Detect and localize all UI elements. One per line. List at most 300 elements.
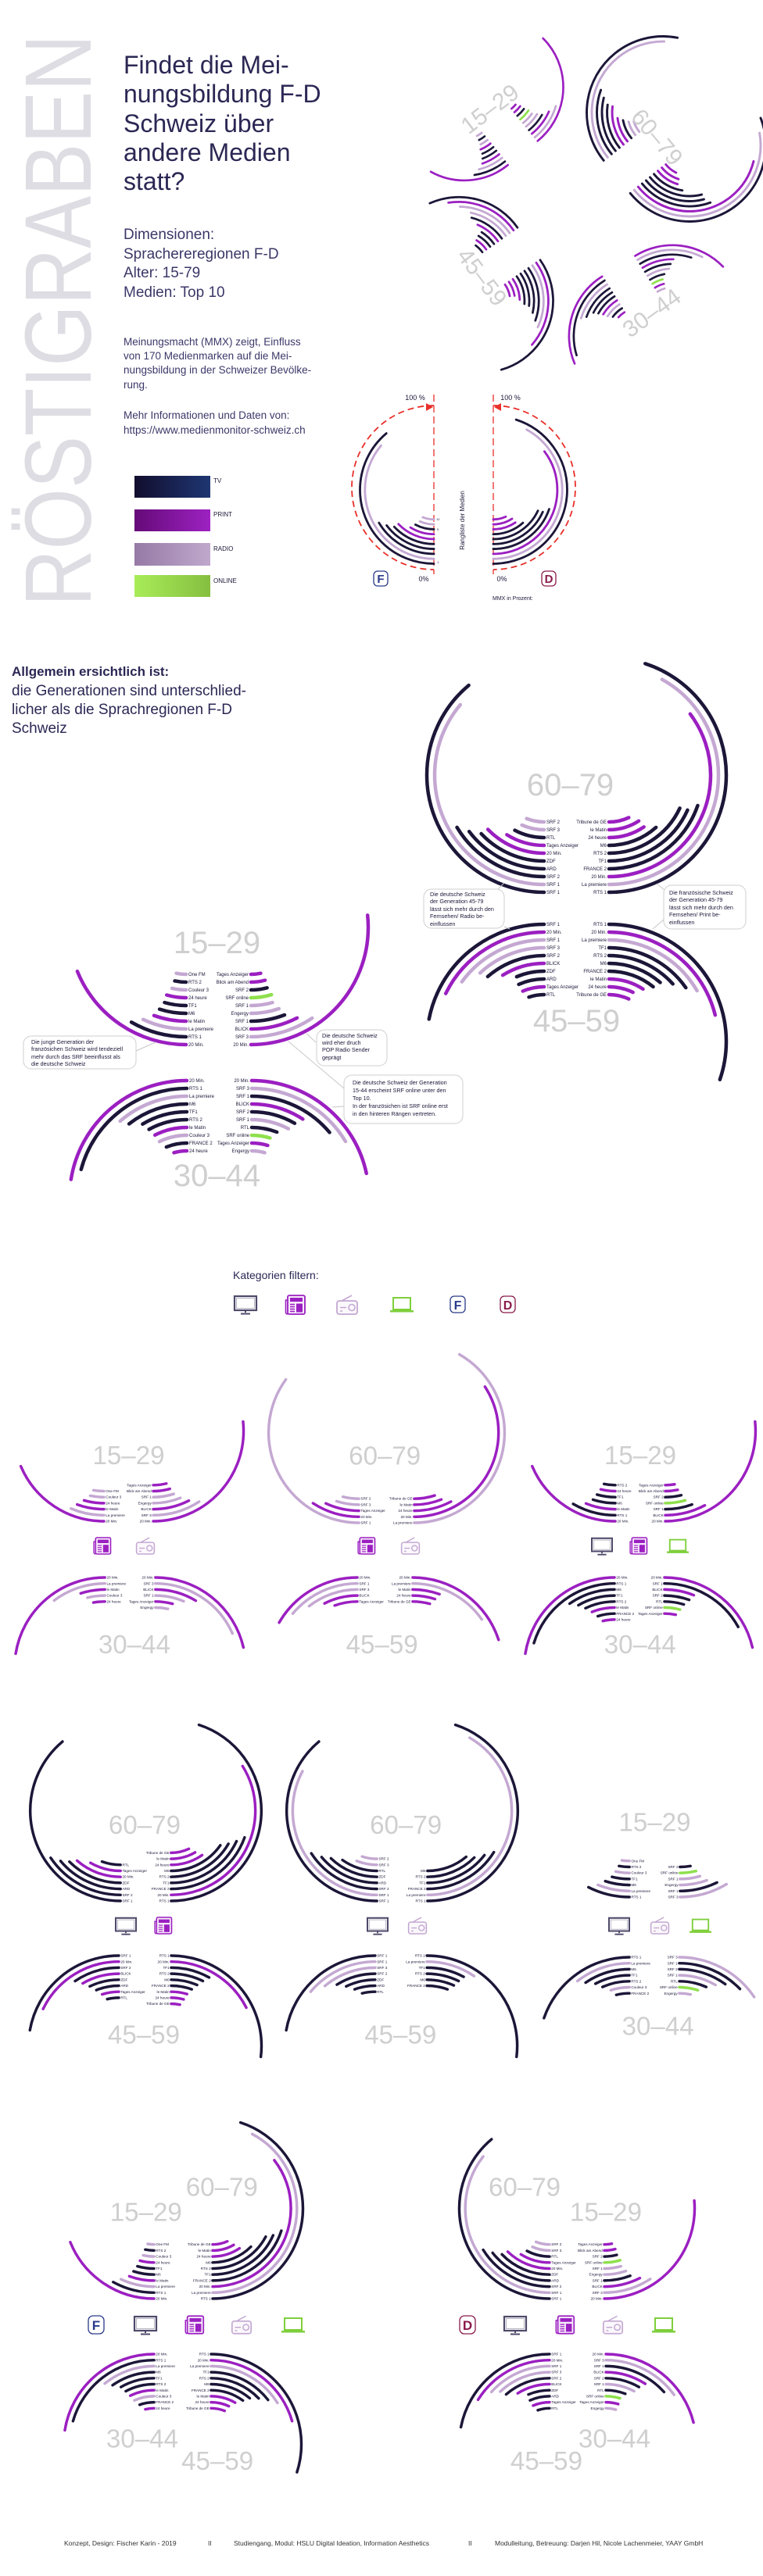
filtered chart: 45-59 print+radio: Tribune de GE [388, 1599, 411, 1603]
chart 15-29 main: le Matin [188, 1020, 205, 1024]
chart 60-79 main: RTS 1 [593, 891, 607, 895]
chart 30-44 main: BLICK [236, 1102, 249, 1107]
top cluster: rotated charts: 60–79 [626, 104, 687, 171]
filtered chart: 45-59 tv+radio: SRF 3 [377, 1966, 388, 1970]
filtered chart: 45-59 tv+radio: RTS 1 [415, 1954, 425, 1958]
combined chart D: 45-59 / 30-44: RTL [597, 2388, 604, 2392]
title: Findet die Mei- [124, 51, 289, 79]
filtered chart: 45-59 tv+print: 24 heure [155, 1995, 170, 1999]
filtered chart: 45-59 tv+print: ARD [120, 1984, 129, 1988]
axis label: Rangliste der Medien [459, 491, 466, 550]
chart 30-44 main: SRF 2 [236, 1110, 250, 1115]
filtered chart: 60-79 tv+radio [287, 1720, 518, 1903]
chart 45-59 main: Tribune de GE [576, 993, 607, 998]
filtered chart: 30-44 print+radio: Couleur 3 [106, 1594, 123, 1598]
filtered chart: 30-44 tv+print+online: BLICK [652, 1588, 664, 1592]
dimensions text: Medien: Top 10 [124, 284, 225, 301]
chart 15-29 main: RTS 2 [188, 981, 202, 985]
filtered chart: 30-44 tv+radio+online: 30–44 [622, 2012, 694, 2041]
combined chart F: 30-44 / 45-59: le Matin [197, 2394, 210, 2398]
callout: SRF online: in den hinteren Rängen vertreten. [353, 1110, 436, 1117]
description paragraph: rung. [124, 379, 148, 391]
filtered chart: 15-29 tv+print+online [525, 1341, 755, 1524]
chart 30-44 main: SRF 3 [236, 1087, 250, 1091]
filtered chart: 60-79 tv+radio: RTL [378, 1869, 386, 1873]
filtered chart: 15-29 tv+print+online: SRF online [646, 1501, 664, 1505]
icons: print radio [94, 1538, 154, 1554]
filtered chart: 45-59 tv+print: 20 Min. [158, 1960, 170, 1963]
filtered chart: 45-59 print+radio: SRF 3 [359, 1588, 370, 1592]
filtered chart: 15-29 print+radio: La premiere [106, 1513, 125, 1517]
footer credits: Modulleitung, Betreuung: Darjen Hil, Nicole Lachenmeier, YAAY GmbH [495, 2539, 703, 2547]
chart 15-29 main: TF1 [188, 1004, 197, 1009]
combined chart F: 30-44 / 45-59: RTS 1 [156, 2358, 167, 2362]
filtered chart: 30-44 tv+print+online: SRF 1 [653, 1581, 663, 1585]
combined chart F: 15-29 / 60-79: RTS 1 [156, 2291, 167, 2295]
callout: pop radio: geprägt [322, 1054, 341, 1061]
chart 60-79 main: Tribune de GE [576, 820, 607, 825]
filtered chart: 60-79 tv+print: Tribune de GE [146, 1851, 170, 1855]
combined chart D: 60-79 / 15-29 [459, 2118, 695, 2301]
filtered chart: 30-44 tv+print+online: 20 Min. [651, 1576, 663, 1580]
filtered chart: 45-59 tv+radio: RTS 2 [415, 1972, 425, 1976]
combined chart F: 15-29 / 60-79: 24 heure [156, 2260, 170, 2264]
filtered chart: 15-29 print+radio: BLICK [141, 1507, 152, 1511]
section 2 heading: Schweiz [12, 720, 67, 737]
filtered chart: 60-79 tv+print: le Matin [156, 1857, 170, 1861]
combined chart F: 30-44 / 45-59: M6 [204, 2382, 210, 2386]
combined chart F: 15-29 / 60-79: La premiere [156, 2285, 175, 2288]
filtered chart: 15-29 tv+radio+online: SRF 3 [668, 1895, 679, 1899]
combined chart D: 45-59 / 30-44: SRF 2 [594, 2376, 604, 2380]
chart 30-44 main: RTS 1 [189, 1087, 203, 1091]
filtered chart: 15-29 tv+radio+online: RTS 2 [631, 1865, 642, 1869]
icons: print radio [358, 1538, 419, 1554]
chart 60-79 main: 60–79 [527, 768, 614, 802]
chart 30-44 main: 30–44 [174, 1159, 260, 1193]
chart 30-44 main: Couleur 3 [189, 1134, 210, 1138]
chart 15-29 main: SRF online [225, 996, 249, 1001]
chart 15-29 main: SRF 1 [235, 1004, 249, 1009]
filtered chart: 15-29 print+radio: le Matin [106, 1507, 119, 1511]
filtered chart: 30-44 tv+radio+online: La premiere [631, 1961, 650, 1965]
chart 15-29 main: Blick am Abend [217, 981, 249, 985]
callout: SRF online: In der französichen ist SRF online erst [353, 1102, 448, 1109]
chart 45-59 main: RTL [546, 993, 556, 998]
chart 60-79 main: ZDF [546, 859, 556, 864]
legend diagram F [352, 394, 508, 586]
filtered chart: 45-59 tv+radio [285, 1954, 518, 2136]
chart 60-79 main: FRANCE 2 [583, 867, 607, 872]
filtered chart: 30-44 tv+radio+online: M6 [631, 1967, 636, 1971]
filtered chart: 45-59 print+radio: Tages Anzeiger [359, 1599, 384, 1603]
description paragraph: von 170 Medienmarken auf die Mei- [124, 350, 292, 362]
filtered chart: 15-29 tv+radio+online: SRF 2 [668, 1865, 679, 1869]
footer credits: Konzept, Design: Fischer Karin - 2019 [64, 2539, 177, 2547]
combined chart D: 60-79 / 15-29: SRF online [585, 2260, 603, 2264]
filtered chart: 30-44 tv+radio+online: RTS 2 [631, 1979, 642, 1983]
filtered chart: 15-29 print+radio: Blick am Abend [127, 1489, 152, 1493]
filtered chart: 30-44 tv+radio+online: FRANCE 2 [631, 1992, 650, 1995]
combined chart D: 45-59 / 30-44: SRF 1 [551, 2364, 562, 2368]
callout: young French generation [23, 1036, 156, 1069]
filtered chart: 30-44 tv+radio+online: RTL [671, 1979, 678, 1983]
chart 15-29 main: 15–29 [174, 926, 260, 960]
filtered chart: 15-29 tv+print+online: 24 heure [617, 1489, 632, 1493]
footer credits: II [208, 2539, 212, 2547]
filtered chart: 30-44 print+radio: Engergy [140, 1606, 154, 1610]
chart 60-79 main: 20 Min. [546, 852, 562, 856]
combined chart F: 30-44 / 45-59: M6 [156, 2371, 161, 2374]
combined chart F: 15-29 / 60-79: le Matin [199, 2249, 211, 2253]
legend diagram D [419, 394, 575, 602]
filtered chart: 60-79 tv+print: 20 Min. [122, 1875, 134, 1879]
filtered chart: 60-79 tv+print: 24 heure [155, 1863, 170, 1867]
filtered chart: 45-59 tv+print: le Matin [157, 1990, 170, 1994]
filtered chart: 60-79 tv+radio: TF1 [419, 1881, 426, 1885]
description paragraph: Mehr Informationen und Daten von: [124, 409, 289, 421]
combined chart F: 15-29 / 60-79: Tribune de GE [188, 2242, 211, 2246]
combined chart F: 30-44 / 45-59: RTS 2 [156, 2382, 167, 2386]
combined chart D: 45-59 / 30-44: SRF 1 [551, 2353, 562, 2356]
filtered chart: 15-29 tv+radio+online: SRF 1 [668, 1889, 679, 1893]
filtered chart: 30-44 tv+print+online: M6 [616, 1588, 622, 1592]
callout: German 45-79: Fernsehen/ Radio be- [430, 913, 485, 920]
filtered chart: 45-59 tv+radio: RTL [377, 1990, 384, 1994]
combined chart F: 15-29 / 60-79: 60–79 [186, 2173, 258, 2202]
filtered chart: 15-29 tv+radio+online: Couleur 3 [631, 1871, 647, 1875]
chart 30-44 main: SRF online [226, 1134, 250, 1138]
filtered chart: 45-59 tv+radio: La premiere [406, 1960, 425, 1963]
filtered chart: 45-59 tv+print: Tribune de GE [146, 2002, 170, 2006]
combined chart F: 30-44 / 45-59: RTS 2 [199, 2376, 210, 2380]
combined chart D: 60-79 / 15-29: 20 Min. [551, 2267, 563, 2271]
chart 60-79 main: TF1 [598, 859, 607, 864]
combined chart F: 30-44 / 45-59: Couleur 3 [156, 2394, 172, 2398]
combined chart F: 15-29 / 60-79: M6 [156, 2273, 161, 2277]
filtered chart: 45-59 tv+print: BLICK [120, 1972, 132, 1976]
filter icons row [235, 1295, 515, 1314]
combined chart D: 45-59 / 30-44: 30–44 [579, 2424, 650, 2453]
callout: pop radio: Die deutsche Schweiz [322, 1032, 378, 1039]
description paragraph: https://www.medienmonitor-schweiz.ch [124, 424, 306, 436]
chart 30-44 main: RTL [241, 1126, 250, 1131]
chart 45-59 main: SRF 2 [546, 954, 561, 959]
legend: colour swatches: ONLINE [213, 577, 237, 584]
chart 60-79 main: Tages Anzeiger [546, 844, 579, 849]
chart 30-44 main: Engergy [232, 1149, 249, 1154]
section 2 heading: licher als die Sprachregionen F-D [12, 702, 232, 718]
filtered chart: 45-59 tv+print: 45–59 [108, 2020, 180, 2049]
filtered chart: 30-44 print+radio: 20 Min. [106, 1576, 119, 1580]
combined chart F: 15-29 / 60-79: 20 Min. [156, 2297, 167, 2301]
filtered chart: 45-59 tv+radio: M6 [420, 1978, 425, 1981]
filter icons row: F [454, 1299, 462, 1313]
chart 45-59 main: RTS 1 [593, 923, 607, 927]
filtered chart: 45-59 tv+print: RTS 2 [159, 1972, 170, 1976]
legend: colour swatches: RADIO [213, 545, 233, 552]
chart 45-59 main: le Matin [590, 977, 607, 982]
combined chart D: 60-79 / 15-29: 20 Min. [591, 2297, 603, 2301]
chart 30-44 main: M6 [189, 1102, 196, 1107]
filtered chart: 45-59 print+radio [267, 1576, 503, 1758]
callout: French 45-79: der Generation 45-79 [669, 896, 722, 903]
dimensions text: Alter: 15-79 [124, 265, 200, 281]
filtered chart: 60-79 print+radio: La premiere [393, 1521, 413, 1525]
chart 45-59 main: ARD [546, 977, 557, 982]
filtered chart: 45-59 tv+radio: FRANCE 2 [407, 1984, 425, 1988]
title: nungsbildung F-D [124, 80, 321, 108]
combined chart D: 60-79 / 15-29: 15–29 [570, 2199, 642, 2228]
combined chart D: 60-79 / 15-29: RTL [551, 2255, 558, 2259]
filtered chart: 45-59 tv+radio: 45–59 [364, 2020, 436, 2049]
callout: young French generation: französichen Schweiz wird tendeziell [31, 1045, 123, 1052]
combined chart F: 15-29 / 60-79: One FM [156, 2242, 169, 2246]
combined chart F: 15-29 / 60-79: M6 [206, 2260, 211, 2264]
callout: SRF online: Die deutsche Schweiz der Generation [353, 1079, 447, 1086]
chart 45-59 main: M6 [600, 962, 607, 966]
chart 45-59 main: La premiere [582, 938, 607, 943]
filtered chart: 30-44 print+radio: BLICK [143, 1588, 154, 1592]
filtered chart: 15-29 tv+radio+online: Engergy [664, 1883, 679, 1887]
filtered chart: 45-59 print+radio: le Matin [398, 1588, 411, 1592]
filtered chart: 30-44 tv+radio+online: SRF online [660, 1985, 678, 1989]
filtered chart: 30-44 tv+radio+online: Engergy [664, 1992, 678, 1995]
filtered chart: 30-44 tv+print+online: 30–44 [604, 1631, 676, 1660]
combined chart D: 45-59 / 30-44: SRF 1 [594, 2382, 604, 2386]
chart 45-59 main: SRF 1 [546, 938, 561, 943]
title: Schweiz über [124, 109, 274, 138]
callout: French 45-79: Die französische Schweiz [669, 889, 733, 896]
chart 60-79 main: SRF 3 [546, 828, 561, 833]
filtered chart: 15-29 tv+print+online: BLICK [653, 1513, 664, 1517]
filtered chart: 45-59 tv+radio: SRF 1 [377, 1960, 388, 1963]
filtered chart: 60-79 tv+radio: SRF 3 [378, 1863, 389, 1867]
callout: pop radio [306, 1030, 387, 1066]
filtered chart: 30-44 print+radio: La premiere [106, 1581, 127, 1585]
combined chart F: 30-44 / 45-59: La premiere [190, 2364, 210, 2368]
title [124, 51, 321, 195]
section 2 heading: Allgemein ersichtlich ist: [12, 664, 169, 679]
filtered chart: 30-44 print+radio: 30–44 [99, 1631, 170, 1660]
section 2 heading [12, 664, 246, 737]
filtered chart: 15-29 tv+print+online: 20 Min. [652, 1520, 664, 1524]
chart 60-79 main: SRF 2 [546, 875, 561, 880]
filtered chart: 15-29 tv+radio+online: RTS 1 [631, 1895, 642, 1899]
filtered chart: 45-59 tv+radio: SRF 2 [377, 1972, 388, 1976]
chart 60-79 main: le Matin [590, 828, 607, 833]
combined chart F: 15-29 / 60-79: 24 heure [196, 2255, 211, 2259]
combined chart D: 45-59 / 30-44: RTL [551, 2406, 558, 2410]
callout: pop radio: POP Radio Sender [322, 1046, 371, 1053]
chart 30-44 main: SRF 1 [236, 1095, 250, 1099]
combined chart F: 30-44 / 45-59: La premiere [156, 2364, 175, 2368]
filtered chart: 45-59 tv+print: SRF 2 [120, 1966, 131, 1970]
title: andere Medien [124, 138, 290, 166]
filtered chart: 45-59 print+radio: 20 Min. [359, 1576, 371, 1580]
top cluster: rotated charts: 45–59 [452, 244, 511, 311]
filtered chart: 15-29 tv+print+online: le Matin [617, 1507, 630, 1511]
filtered chart: 60-79 tv+radio: ARD [378, 1881, 387, 1885]
filtered chart: 45-59 tv+radio: SRF 1 [377, 1954, 388, 1958]
combined chart D: 45-59 / 30-44: SRF online [586, 2394, 604, 2398]
combined chart D: 60-79 / 15-29: BLICK [592, 2285, 604, 2288]
filtered chart: 60-79 tv+print: RTS 1 [159, 1899, 170, 1903]
filtered chart: 45-59 tv+radio: ZDF [377, 1978, 384, 1981]
combined chart F: 15-29 / 60-79: 15–29 [110, 2199, 182, 2228]
chart 15-29 main: BLICK [235, 1027, 249, 1032]
filtered chart: 60-79 print+radio: SRF 2 [360, 1497, 371, 1501]
legend: colour swatches [134, 476, 237, 597]
filtered chart: 15-29 tv+radio+online: La premiere [631, 1889, 651, 1893]
filtered chart: 60-79 tv+print: 60–79 [109, 1811, 181, 1840]
combined chart D: 60-79 / 15-29: ZDF [551, 2273, 558, 2277]
filtered chart: 60-79 tv+radio: 60–79 [370, 1811, 442, 1840]
filtered chart: 15-29 tv+print+online: TF1 [617, 1495, 624, 1499]
combined chart F: 30-44 / 45-59: FRANCE 2 [156, 2400, 174, 2404]
combined chart D: 60-79 / 15-29: SRF 2 [593, 2255, 603, 2259]
top cluster: rotated charts [360, 0, 763, 433]
combined chart D: 60-79 / 15-29: Engergy [589, 2273, 603, 2277]
combined chart D: 60-79 / 15-29: SRF 2 [551, 2242, 562, 2246]
dimensions text: Sprachereregionen F-D [124, 246, 279, 263]
combined chart F: 30-44 / 45-59: TF1 [156, 2376, 163, 2380]
filtered chart: 60-79 tv+radio: SRF 2 [378, 1887, 389, 1891]
filtered chart: 30-44 tv+radio+online: SRF 2 [668, 1967, 678, 1971]
chart 30-44 main [70, 1079, 369, 1315]
combined chart D: 60-79 / 15-29: SRF 3 [551, 2249, 562, 2253]
filtered chart: 45-59 print+radio: 45–59 [346, 1631, 418, 1660]
callout: German 45-79 [424, 883, 510, 929]
filtered chart: 30-44 print+radio: le Matin [106, 1588, 120, 1592]
filtered chart: 60-79 tv+print: RTS 2 [159, 1875, 170, 1879]
filtered chart: 60-79 tv+radio: SRF 1 [378, 1893, 389, 1897]
filtered chart: 60-79 print+radio: SRF 3 [360, 1502, 371, 1506]
chart 30-44 main: La premiere [189, 1095, 215, 1099]
filtered chart: 30-44 tv+radio+online: Couleur 3 [631, 1985, 647, 1989]
callout: French 45-79: lässt sich mehr durch den [669, 904, 733, 911]
chart 60-79 main: ARD [546, 867, 557, 872]
combined chart F: 30-44 / 45-59: RTS 1 [199, 2353, 210, 2356]
legend diagram F: 5 [437, 527, 439, 531]
combined chart D: 45-59 / 30-44: Tages Anzeiger [579, 2400, 604, 2404]
combined chart F: 15-29 / 60-79: TF1 [204, 2273, 211, 2277]
filtered chart: 15-29 tv+print+online: 20 Min. [617, 1520, 629, 1524]
chart 45-59 main: BLICK [546, 962, 560, 966]
chart 30-44 main: RTS 2 [189, 1118, 203, 1123]
filtered chart: 45-59 tv+radio: ARD [377, 1984, 385, 1988]
section 2 heading: die Generationen sind unterschlied- [12, 683, 246, 699]
filtered chart: 30-44 tv+print+online [525, 1576, 754, 1758]
chart 30-44 main: Tages Anzeiger [217, 1142, 249, 1146]
chart 60-79 main: La premiere [582, 883, 607, 888]
chart 15-29 main: 24 heure [188, 996, 207, 1001]
filtered chart: 30-44 tv+print+online: le Matin [616, 1606, 629, 1610]
chart 30-44 main: 20 Min. [189, 1079, 205, 1084]
combined chart D: 60-79 / 15-29: SRF 1 [593, 2267, 603, 2271]
icons row D: D [463, 2318, 472, 2333]
chart 45-59 main: 45–59 [533, 1004, 620, 1038]
filtered chart: 60-79 tv+print: Tages Anzeiger [122, 1869, 147, 1873]
chart 60-79 main: RTL [546, 836, 556, 841]
legend diagram F: 10 [436, 517, 440, 521]
dimensions text [124, 227, 279, 301]
filtered chart: 15-29 print+radio: Engergy [138, 1501, 152, 1505]
combined chart D: 45-59 / 30-44: BLICK [551, 2382, 563, 2386]
callout: pop radio: wird eher druch [321, 1039, 361, 1046]
filtered chart: 45-59 print+radio: La premiere [392, 1581, 411, 1585]
filtered chart: 60-79 tv+print: RTL [122, 1863, 130, 1867]
filtered chart: 30-44 tv+print+online: RTS 1 [616, 1581, 627, 1585]
combined chart D: 60-79 / 15-29: SRF 2 [551, 2285, 562, 2288]
combined chart F: 15-29 / 60-79: RTS 2 [156, 2249, 167, 2253]
combined chart D: 45-59 / 30-44: 20 Min. [593, 2353, 604, 2356]
filtered chart: 30-44 tv+radio+online: RTS 1 [631, 1956, 642, 1960]
callout: German 45-79: lässt sich mehr durch den [430, 906, 494, 913]
combined chart D: 45-59 / 30-44: 45–59 [510, 2447, 582, 2476]
filtered chart: 30-44 tv+radio+online: SRF 1 [668, 1961, 678, 1965]
chart 60-79 main: SRF 1 [546, 891, 561, 895]
combined chart F: 30-44 / 45-59: FRANCE 2 [192, 2388, 210, 2392]
chart 45-59 main: 24 heure [588, 985, 607, 990]
filtered chart: 60-79 tv+print: SRF 1 [122, 1899, 133, 1903]
filtered chart: 60-79 tv+print: ZDF [122, 1881, 130, 1885]
combined chart F: 30-44 / 45-59: 45–59 [181, 2447, 253, 2476]
filtered chart: 60-79 tv+print [30, 1720, 261, 1903]
description paragraph [124, 336, 311, 436]
filtered chart: 15-29 tv+print+online: M6 [617, 1501, 622, 1505]
filtered chart: 15-29 print+radio: Tages Anzeiger [127, 1483, 152, 1487]
filtered chart: 45-59 print+radio: BLICK [359, 1594, 371, 1598]
chart 45-59 main: TF1 [598, 946, 607, 951]
filtered chart: 45-59 tv+print: SRF 1 [120, 1954, 131, 1958]
filtered chart: 30-44 tv+print+online: RTS 2 [616, 1599, 627, 1603]
combined chart F: 30-44 / 45-59: 20 Min. [156, 2353, 167, 2356]
chart 60-79 main: M6 [600, 844, 607, 849]
filtered chart: 60-79 print+radio: 20 Min. [360, 1515, 373, 1519]
filtered chart: 60-79 print+radio: Tages Anzeiger [360, 1509, 385, 1513]
filtered chart: 15-29 tv+print+online: Tages Anzeiger [639, 1483, 664, 1487]
callout: French 45-79 [653, 884, 746, 929]
filtered chart: 30-44 print+radio: 20 Min. [141, 1576, 154, 1580]
chart 15-29 main: SRF 3 [235, 1035, 249, 1040]
chart 60-79 main: 20 Min. [591, 875, 607, 880]
filtered chart: 60-79 tv+print: SRF 2 [122, 1893, 133, 1897]
chart 45-59 main: Tages Anzeiger [546, 985, 579, 990]
combined chart F: 15-29 / 60-79: le Matin [156, 2278, 169, 2282]
combined chart F: 15-29 / 60-79: RTS 1 [201, 2297, 211, 2301]
filtered chart: 45-59 tv+print: FRANCE 2 [152, 1984, 170, 1988]
icons row F: F [92, 2318, 100, 2333]
chart 60-79 main [427, 658, 726, 895]
combined chart F: 30-44 / 45-59: Tribune de GE [186, 2406, 210, 2410]
legend diagram D: 0% [496, 575, 507, 583]
filtered chart: 30-44 tv+radio+online: SRF 1 [668, 1974, 678, 1978]
filtered chart: 60-79 tv+radio: FRANCE 2 [408, 1887, 426, 1891]
filtered chart: 45-59 tv+print: Tages Anzeiger [120, 1990, 145, 1994]
icons row F [88, 2316, 305, 2335]
legend diagram F: F [377, 573, 385, 586]
filtered chart: 30-44 tv+print+online: Tages Anzeiger [638, 1612, 663, 1616]
filtered chart: 45-59 tv+print [29, 1954, 261, 2136]
chart 15-29 main: Couleur 3 [188, 988, 210, 993]
filtered chart: 60-79 print+radio: Tribune de GE [389, 1497, 413, 1501]
combined chart F: 15-29 / 60-79: FRANCE 2 [193, 2278, 211, 2282]
combined chart F: 30-44 / 45-59 [64, 2353, 301, 2535]
filtered chart: 15-29 print+radio: 20 Min. [106, 1520, 117, 1524]
filter heading: Kategorien filtern: [233, 1269, 319, 1281]
combined chart F: 15-29 / 60-79: TF1 [156, 2267, 163, 2271]
